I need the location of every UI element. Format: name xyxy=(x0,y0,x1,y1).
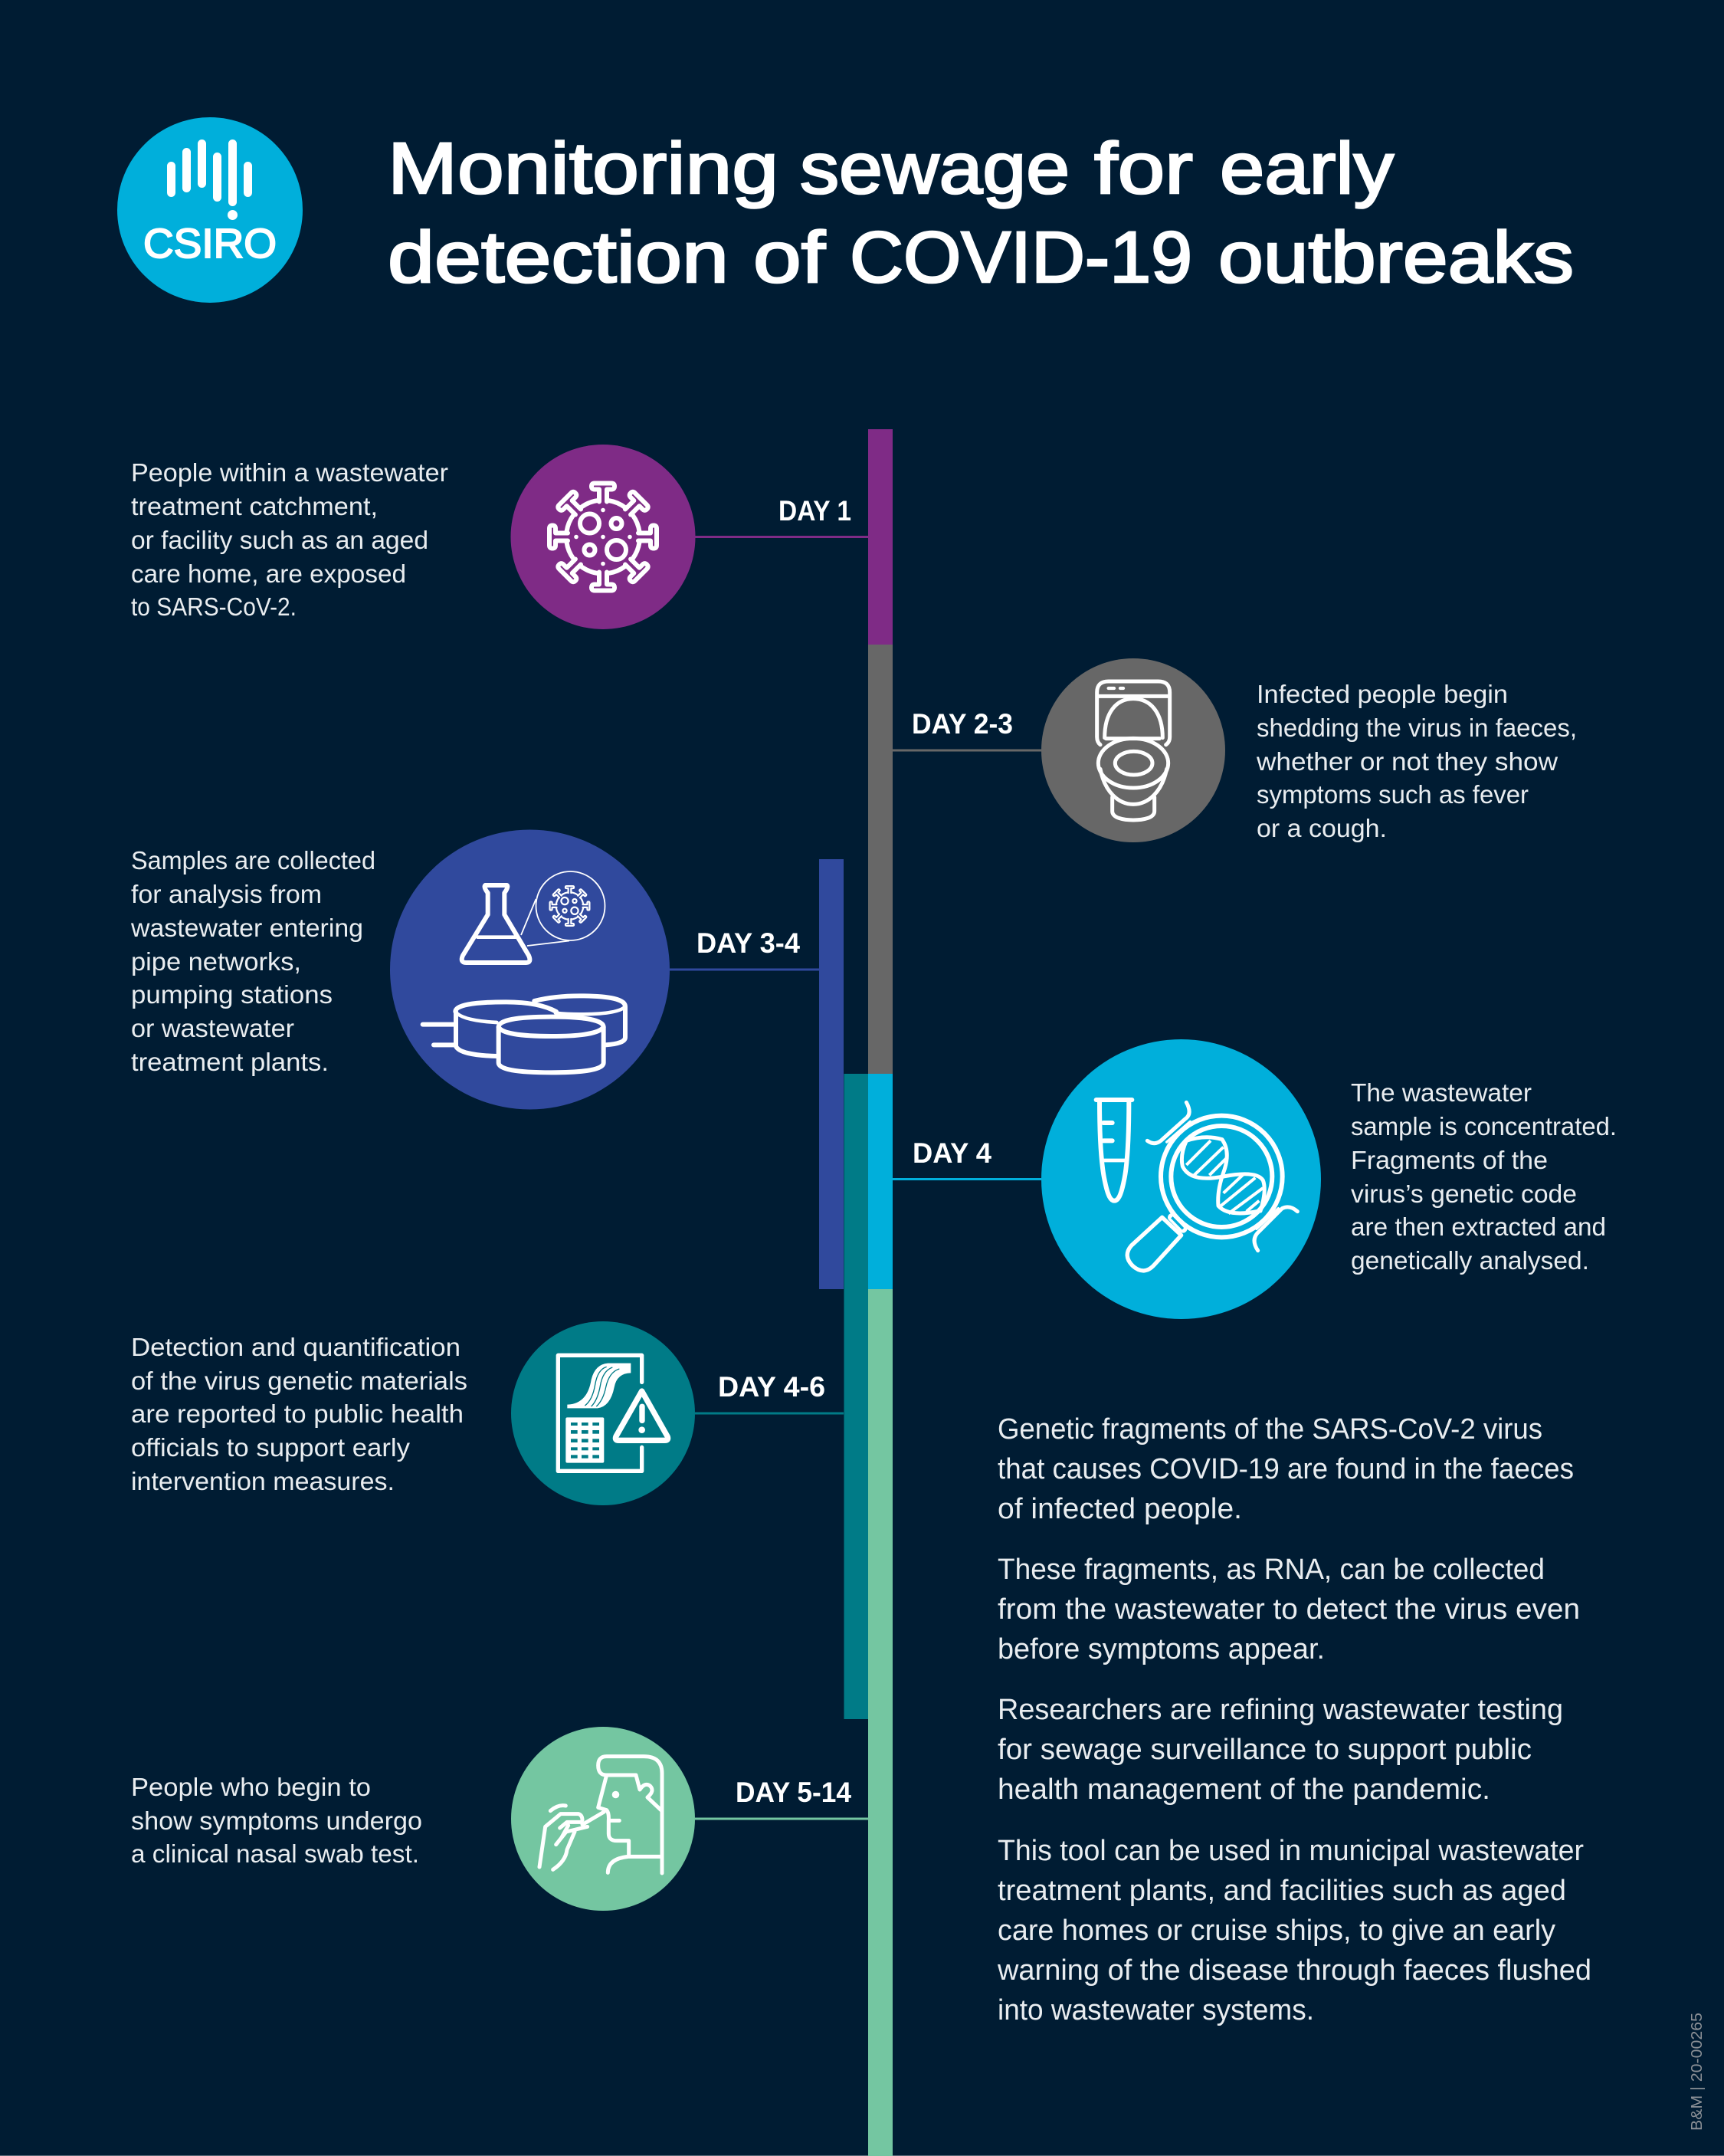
step: day 5-14 text: People who begin to xyxy=(131,1773,371,1801)
step: day 2-3 text: or a cough. xyxy=(1257,814,1387,842)
logo: CSIRO xyxy=(117,117,303,303)
step: day 3-4 text: pipe networks, xyxy=(131,947,301,976)
step: day 2-3 text xyxy=(1256,680,1577,842)
step: day 4 text xyxy=(1351,1078,1617,1275)
text block: explanation: for sewage surveillance to support public xyxy=(998,1734,1532,1766)
text block: explanation: These fragments, as RNA, can be collected xyxy=(998,1554,1545,1586)
step: day 1 text: or facility such as an aged xyxy=(131,526,428,554)
step: day 3-4 text: Samples are collected xyxy=(131,846,375,875)
step: day 4-6 text: officials to support early xyxy=(131,1433,411,1462)
connector and label: day 4-6: DAY 4-6 xyxy=(718,1371,825,1403)
text block: explanation xyxy=(997,1413,1591,2026)
step: day 1 text: People within a wastewater xyxy=(131,458,448,487)
step: day 4-6 text: Detection and quantification xyxy=(131,1333,460,1361)
title: detection xyxy=(388,217,729,298)
step: day 3-4 text xyxy=(130,846,375,1076)
title: for xyxy=(1094,128,1193,209)
text block: explanation: health management of the pandemic. xyxy=(998,1774,1490,1806)
step: day 4 text: virus’s genetic code xyxy=(1351,1180,1577,1208)
text block: explanation: treatment plants, and facilities such as aged xyxy=(998,1875,1566,1907)
title: sewage xyxy=(800,128,1070,209)
connector and label: day 4-6 xyxy=(695,1371,844,1415)
step: day 5-14 text: a clinical nasal swab test. xyxy=(131,1839,419,1868)
step: day 1 text xyxy=(131,458,448,621)
icon: test tube and magnified DNA in cyan circle xyxy=(1041,1039,1321,1319)
connector and label: day 3-4 xyxy=(670,927,819,970)
step: day 2-3 text: shedding the virus in faeces, xyxy=(1257,714,1577,742)
icon: virus in purple circle xyxy=(510,445,696,629)
text block: explanation: that causes COVID-19 are found in the faeces xyxy=(998,1453,1574,1485)
step: day 1 text: treatment catchment, xyxy=(131,492,378,520)
connector and label: day 4 xyxy=(893,1137,1041,1180)
timeline bars xyxy=(819,429,893,2156)
title: outbreaks xyxy=(1218,217,1574,298)
step: day 4 text: The wastewater xyxy=(1351,1078,1532,1107)
text block: explanation: warning of the disease through faeces flushed xyxy=(997,1954,1591,1987)
text block: explanation: Genetic fragments of the SARS-CoV-2 virus xyxy=(998,1413,1542,1446)
connector and label: day 4: DAY 4 xyxy=(913,1137,991,1169)
step: day 4 text: are then extracted and xyxy=(1351,1213,1606,1241)
step: day 5-14 text: show symptoms undergo xyxy=(131,1807,422,1835)
icon: flask and tanks in blue circle xyxy=(390,829,670,1110)
connector and label: day 2-3 xyxy=(893,708,1041,751)
title: COVID-19 xyxy=(850,217,1192,298)
step: day 2-3 text: symptoms such as fever xyxy=(1257,780,1529,809)
step: day 4 text: genetically analysed. xyxy=(1351,1246,1589,1275)
step: day 4-6 text xyxy=(131,1333,467,1495)
title: Monitoring xyxy=(388,128,778,209)
step: day 4-6 text: of the virus genetic materials xyxy=(131,1367,467,1395)
connector and label: day 5-14 xyxy=(695,1777,868,1820)
step: day 1 text: to SARS-CoV-2. xyxy=(131,592,297,621)
text block: explanation: care homes or cruise ships, to give an early xyxy=(998,1915,1555,1947)
connector and label: day 5-14: DAY 5-14 xyxy=(736,1777,851,1808)
step: day 5-14 text xyxy=(131,1773,422,1868)
job code: B&M | 20-00265 xyxy=(1689,2013,1706,2131)
step: day 4 text: Fragments of the xyxy=(1351,1146,1548,1174)
step: day 2-3 text: Infected people begin xyxy=(1257,680,1508,708)
text block: explanation: This tool can be used in municipal wastewater xyxy=(998,1835,1584,1867)
icon: nasal swab in green circle xyxy=(511,1727,695,1911)
text block: explanation: of infected people. xyxy=(998,1493,1242,1525)
title: of xyxy=(753,217,826,298)
connector and label: day 1 xyxy=(695,495,868,538)
step: day 2-3 text: whether or not they show xyxy=(1256,747,1558,776)
text block: explanation: Researchers are refining wastewater testing xyxy=(998,1694,1563,1726)
text block: explanation: before symptoms appear. xyxy=(998,1633,1325,1665)
step: day 3-4 text: treatment plants. xyxy=(131,1048,329,1076)
step: day 3-4 text: wastewater entering xyxy=(130,914,363,942)
step: day 3-4 text: pumping stations xyxy=(131,980,333,1009)
text block: explanation: into wastewater systems. xyxy=(998,1994,1314,2026)
connector and label: day 2-3: DAY 2-3 xyxy=(912,708,1013,740)
text block: explanation: from the wastewater to detect the virus even xyxy=(998,1593,1580,1626)
step: day 4-6 text: intervention measures. xyxy=(131,1467,395,1495)
icon: toilet in grey circle xyxy=(1041,658,1225,842)
step: day 3-4 text: for analysis from xyxy=(131,880,322,908)
connector and label: day 1: DAY 1 xyxy=(778,495,851,527)
logo: CSIRO: CSIRO xyxy=(143,221,277,267)
connector and label: day 3-4: DAY 3-4 xyxy=(696,927,800,959)
title xyxy=(388,128,1574,298)
title: early xyxy=(1220,128,1395,209)
step: day 4-6 text: are reported to public health xyxy=(131,1400,464,1428)
icon: report with warning in teal circle xyxy=(511,1321,695,1505)
step: day 4 text: sample is concentrated. xyxy=(1351,1112,1617,1140)
step: day 3-4 text: or wastewater xyxy=(131,1014,294,1042)
step: day 1 text: care home, are exposed xyxy=(131,560,406,588)
